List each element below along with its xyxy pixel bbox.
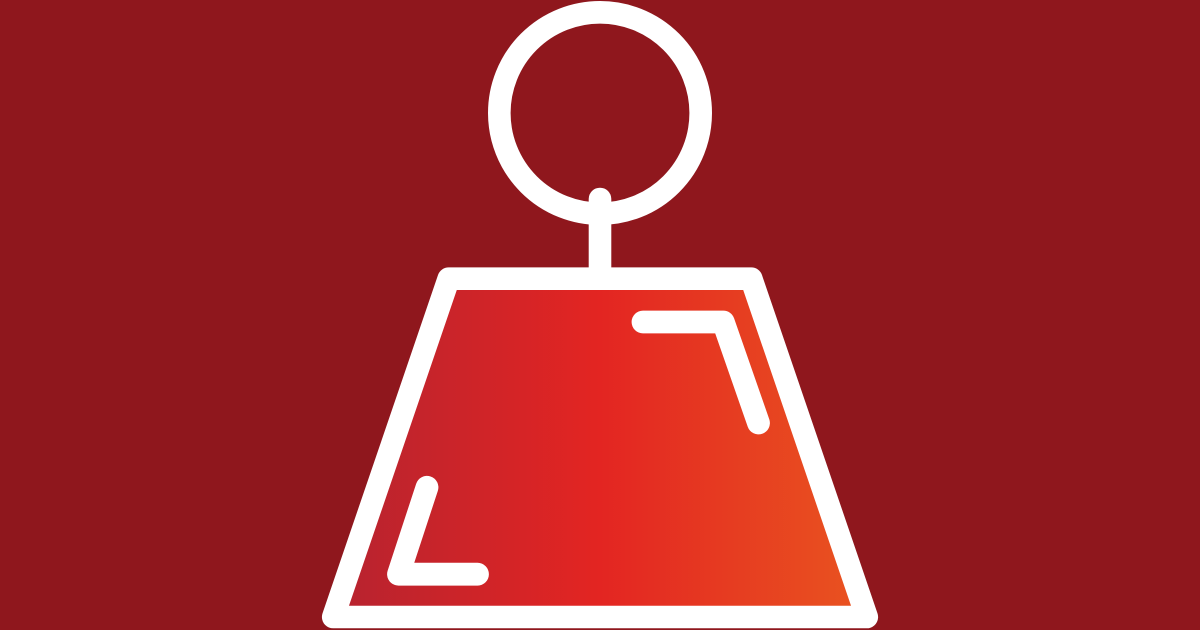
- highlight: bottom left: [398, 487, 478, 574]
- ring: [499, 12, 701, 214]
- highlight: top right: [643, 322, 758, 423]
- ring connector: [589, 199, 611, 272]
- weight body: [333, 279, 867, 617]
